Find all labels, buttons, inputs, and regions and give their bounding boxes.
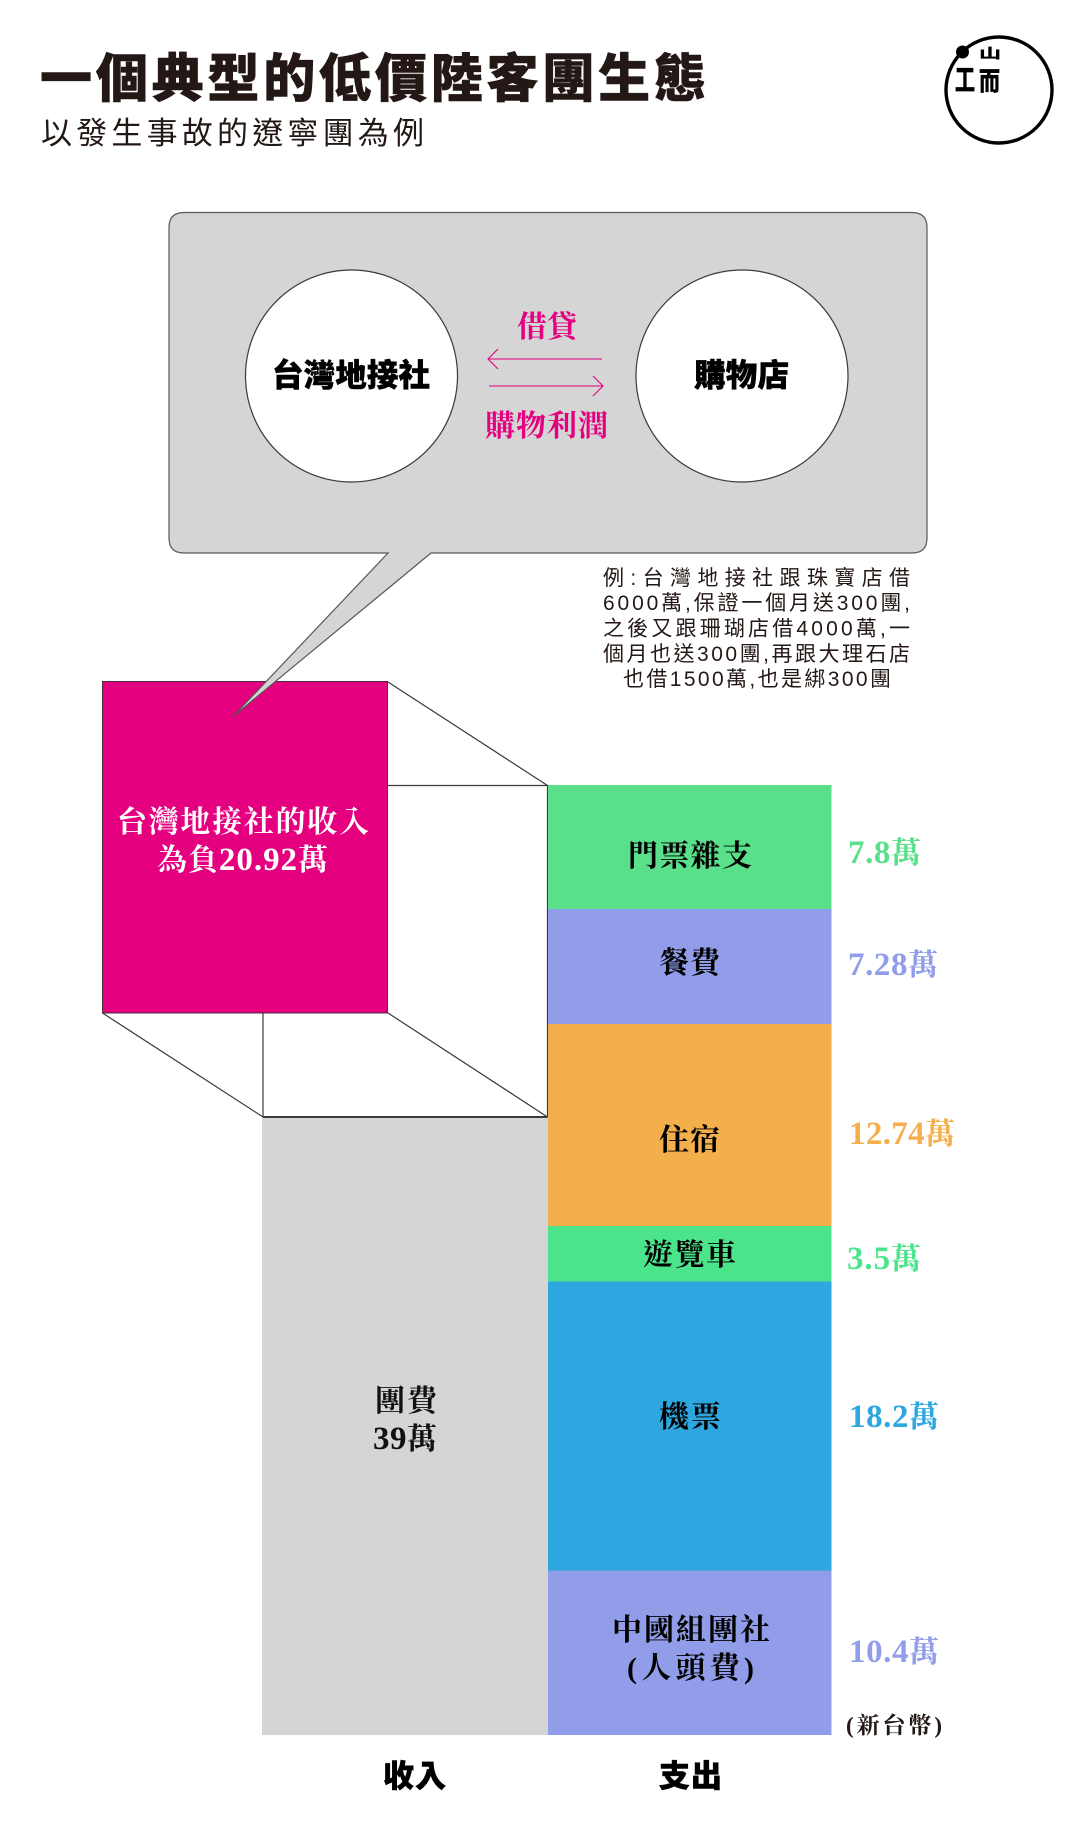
panel: net income block: 台灣地接社的收入	[117, 806, 369, 839]
chart: expense column	[548, 785, 832, 1735]
segment: China group agency: 中國組團社	[612, 1614, 770, 1647]
segment: China group agency: (人頭費)	[627, 1652, 754, 1685]
arrow: shopping profit, agency to shop	[489, 376, 603, 396]
icon: logo: 工	[955, 64, 975, 97]
segment: tickets and misc	[548, 785, 832, 910]
segment: tour bus	[548, 1226, 832, 1282]
text: example note: 也借1500萬,也是綁300團	[623, 668, 891, 691]
segment: China group agency	[548, 1570, 832, 1735]
label: loan: 借貸	[517, 311, 581, 344]
segment: lodging	[548, 1024, 832, 1226]
segment: meals	[548, 909, 832, 1024]
note: currency unit: (新台幣)	[846, 1713, 942, 1738]
values: expense amounts	[847, 835, 955, 1670]
segment: tickets and misc: 門票雜支	[628, 840, 752, 873]
segment: meals: 餐費	[659, 947, 724, 980]
icon: logo: 而	[979, 67, 1000, 95]
circle: local agency: 台灣地接社	[272, 357, 430, 393]
values: expense amounts: 18.2萬	[849, 1399, 939, 1435]
chart: income column	[262, 1118, 549, 1735]
title: 一個典型的低價陸客團生態	[40, 51, 706, 109]
circle: shop	[636, 270, 848, 482]
panel: net income block: 為負20.92萬	[157, 842, 328, 878]
panel: speech bubble	[169, 212, 927, 716]
axis label: expense: 支出	[659, 1759, 722, 1794]
circle: local agency	[246, 270, 458, 482]
icon: logo: 山	[979, 46, 1001, 61]
chart: income column: 團費	[375, 1385, 441, 1418]
label: shopping profit: 購物利潤	[485, 410, 608, 443]
segment: tour bus: 遊覽車	[643, 1239, 736, 1272]
values: expense amounts: 7.28萬	[848, 947, 938, 983]
panel: net income block	[102, 682, 388, 1013]
circle: shop: 購物店	[694, 357, 789, 393]
values: expense amounts: 7.8萬	[848, 835, 921, 871]
values: expense amounts: 12.74萬	[849, 1116, 955, 1152]
text: example note: 例:台灣地接社跟珠寶店借	[603, 567, 910, 590]
segment: lodging: 住宿	[659, 1124, 720, 1157]
cube outline connecting loss to chart	[102, 682, 548, 1117]
text: example note	[603, 567, 910, 691]
segment: air tickets: 機票	[659, 1401, 721, 1434]
values: expense amounts: 3.5萬	[847, 1241, 921, 1277]
text: example note: 個月也送300團,再跟大理石店	[603, 643, 910, 666]
segment: air tickets	[548, 1282, 832, 1571]
axis label: income: 收入	[383, 1759, 446, 1794]
text: example note: 之後又跟珊瑚店借4000萬,一	[603, 618, 910, 640]
arrow: loan, shop to agency	[488, 349, 602, 369]
chart: income column: 39萬	[373, 1421, 437, 1457]
values: expense amounts: 10.4萬	[849, 1634, 939, 1670]
subtitle: 以發生事故的遼寧團為例	[41, 116, 424, 151]
icon: logo	[946, 37, 1052, 143]
text: example note: 6000萬,保證一個月送300團,	[603, 592, 910, 615]
